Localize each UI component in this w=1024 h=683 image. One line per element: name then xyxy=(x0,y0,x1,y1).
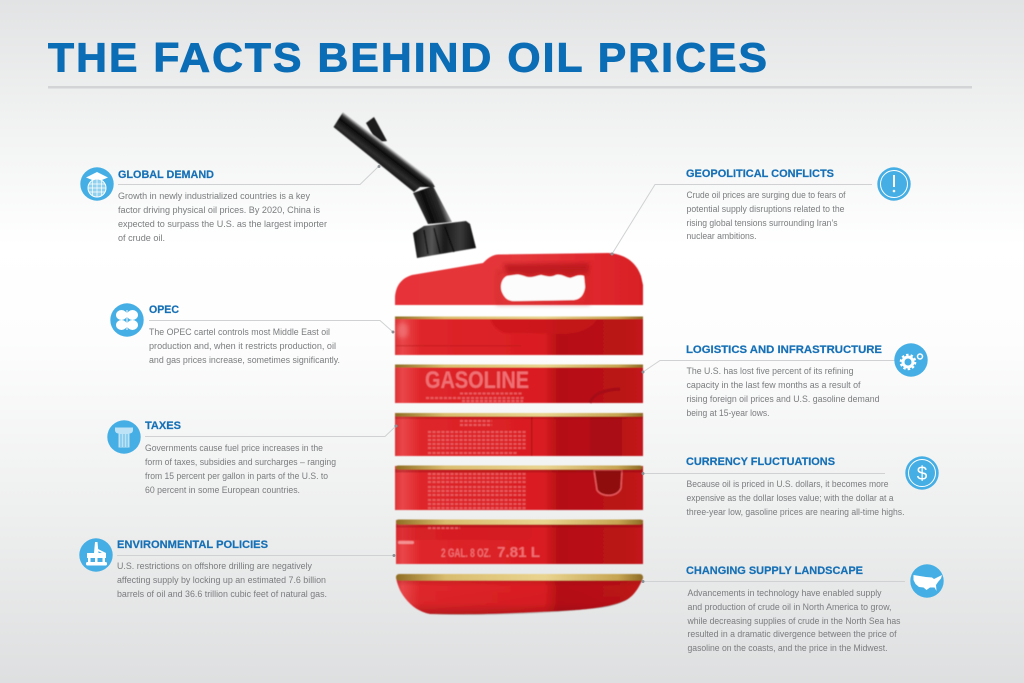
panel: global demand xyxy=(80,165,381,244)
can top slice xyxy=(395,253,643,305)
body text: Crude oil prices are surging due to fears of xyxy=(686,190,846,201)
body text: Because oil is priced in U.S. dollars, it becomes more xyxy=(686,479,888,490)
panel: changing supply landscape xyxy=(642,564,944,654)
body text: The U.S. has lost five percent of its refining xyxy=(686,366,854,377)
body text: U.S. restrictions on offshore drilling are negatively xyxy=(117,561,312,572)
body text: Governments cause fuel price increases in the xyxy=(145,443,323,454)
body text: expected to surpass the U.S. as the largest importer xyxy=(118,219,328,230)
body text: expensive as the dollar loses value; with the dollar at a xyxy=(686,493,894,504)
body text xyxy=(686,190,846,242)
connector xyxy=(149,320,394,334)
icon: offshore rig xyxy=(79,538,113,572)
body text: 60 percent in some European countries. xyxy=(145,485,300,496)
heading: ENVIRONMENTAL POLICIES xyxy=(117,539,268,551)
icon: dollar sign xyxy=(905,456,939,490)
heading: GLOBAL DEMAND xyxy=(118,169,214,181)
icon: column xyxy=(107,420,141,454)
body text: from 15 percent per gallon in parts of the U.S. to xyxy=(145,471,328,482)
can slice: upper body xyxy=(395,316,643,355)
body text xyxy=(149,327,340,366)
body text: form of taxes, subsidies and surcharges – ranging xyxy=(145,457,336,468)
body text xyxy=(686,366,880,419)
body text xyxy=(687,588,901,654)
body text xyxy=(117,561,327,600)
panel: logistics and infrastructure xyxy=(642,343,928,419)
heading: CURRENCY FLUCTUATIONS xyxy=(686,456,835,468)
body text: rising foreign oil prices and U.S. gasoline demand xyxy=(686,394,880,405)
title: THE FACTS BEHIND OIL PRICES xyxy=(48,34,769,80)
icon: dollar sign: $ xyxy=(917,464,928,485)
body text xyxy=(686,479,904,518)
heading: OPEC xyxy=(149,304,179,316)
connector xyxy=(117,554,396,557)
body text: resulted in a dramatic divergence between the price of xyxy=(688,629,897,640)
connector xyxy=(118,165,380,184)
body text: factor driving physical oil prices. By 2020, China is xyxy=(118,205,320,216)
body text: capacity in the last few months as a result of xyxy=(686,380,861,391)
illustration: red gasoline can sliced into layers xyxy=(334,112,643,615)
body text: barrels of oil and 36.6 trillion cubic feet of natural gas. xyxy=(117,589,327,600)
embossed capacity: 2 GAL. 8 OZ. xyxy=(441,546,491,560)
embossed capacity xyxy=(441,544,540,561)
embossed capacity: 7.81 L xyxy=(497,544,540,561)
body text xyxy=(145,443,336,496)
connector xyxy=(642,580,905,583)
body text: and gas prices increase, sometimes significantly. xyxy=(149,355,340,366)
can slice: capacity marking xyxy=(396,520,643,564)
icon: OPEC logo xyxy=(110,303,144,337)
can slice: warning text xyxy=(395,413,643,456)
heading: GEOPOLITICAL CONFLICTS xyxy=(686,168,834,180)
panel: currency fluctuations xyxy=(642,456,939,518)
body text: gasoline on the coasts, and the price in the Midwest. xyxy=(688,643,888,654)
heading: LOGISTICS AND INFRASTRUCTURE xyxy=(686,344,882,356)
body text: nuclear ambitions. xyxy=(686,231,756,242)
icon: globe with graduation cap xyxy=(80,167,114,201)
body text: while decreasing supplies of crude in the North Sea has xyxy=(687,616,901,627)
body text: being at 15-year lows. xyxy=(686,408,770,419)
body text: rising global tensions surrounding Iran’s xyxy=(686,218,838,229)
body text: The OPEC cartel controls most Middle East oil xyxy=(149,327,330,338)
heading: CHANGING SUPPLY LANDSCAPE xyxy=(686,565,863,577)
body text: three-year low, gasoline prices are nearing all-time highs. xyxy=(686,507,904,518)
connector xyxy=(610,184,872,256)
connector xyxy=(642,472,885,475)
body text xyxy=(118,191,328,244)
can slice: warning text continued xyxy=(395,466,643,510)
embossed word: GASOLINE xyxy=(425,367,529,394)
body text: potential supply disruptions related to the xyxy=(686,204,844,215)
connector xyxy=(145,424,398,436)
icon: exclamation mark xyxy=(877,167,911,201)
body text: Growth in newly industrialized countries is a key xyxy=(118,191,310,202)
body text: and production of crude oil in North America to grow, xyxy=(688,602,892,613)
panel: environmental policies xyxy=(79,538,396,600)
body text: Advancements in technology have enabled supply xyxy=(688,588,882,599)
heading: TAXES xyxy=(145,420,181,432)
spout and cap xyxy=(334,112,476,258)
body text: of crude oil. xyxy=(118,233,165,244)
can slice: GASOLINE label xyxy=(395,364,643,403)
panel: taxes xyxy=(107,420,398,496)
body text: production and, when it restricts production, oil xyxy=(149,341,336,352)
connector xyxy=(642,360,895,374)
body text: affecting supply by locking up an estimated 7.6 billion xyxy=(117,575,326,586)
icon: map of the United States xyxy=(910,564,944,598)
repaired handle hole xyxy=(501,275,585,301)
panel: OPEC xyxy=(110,303,395,366)
panel: geopolitical conflicts xyxy=(610,167,911,256)
icon: gears xyxy=(894,343,928,377)
can base slice xyxy=(396,574,643,615)
